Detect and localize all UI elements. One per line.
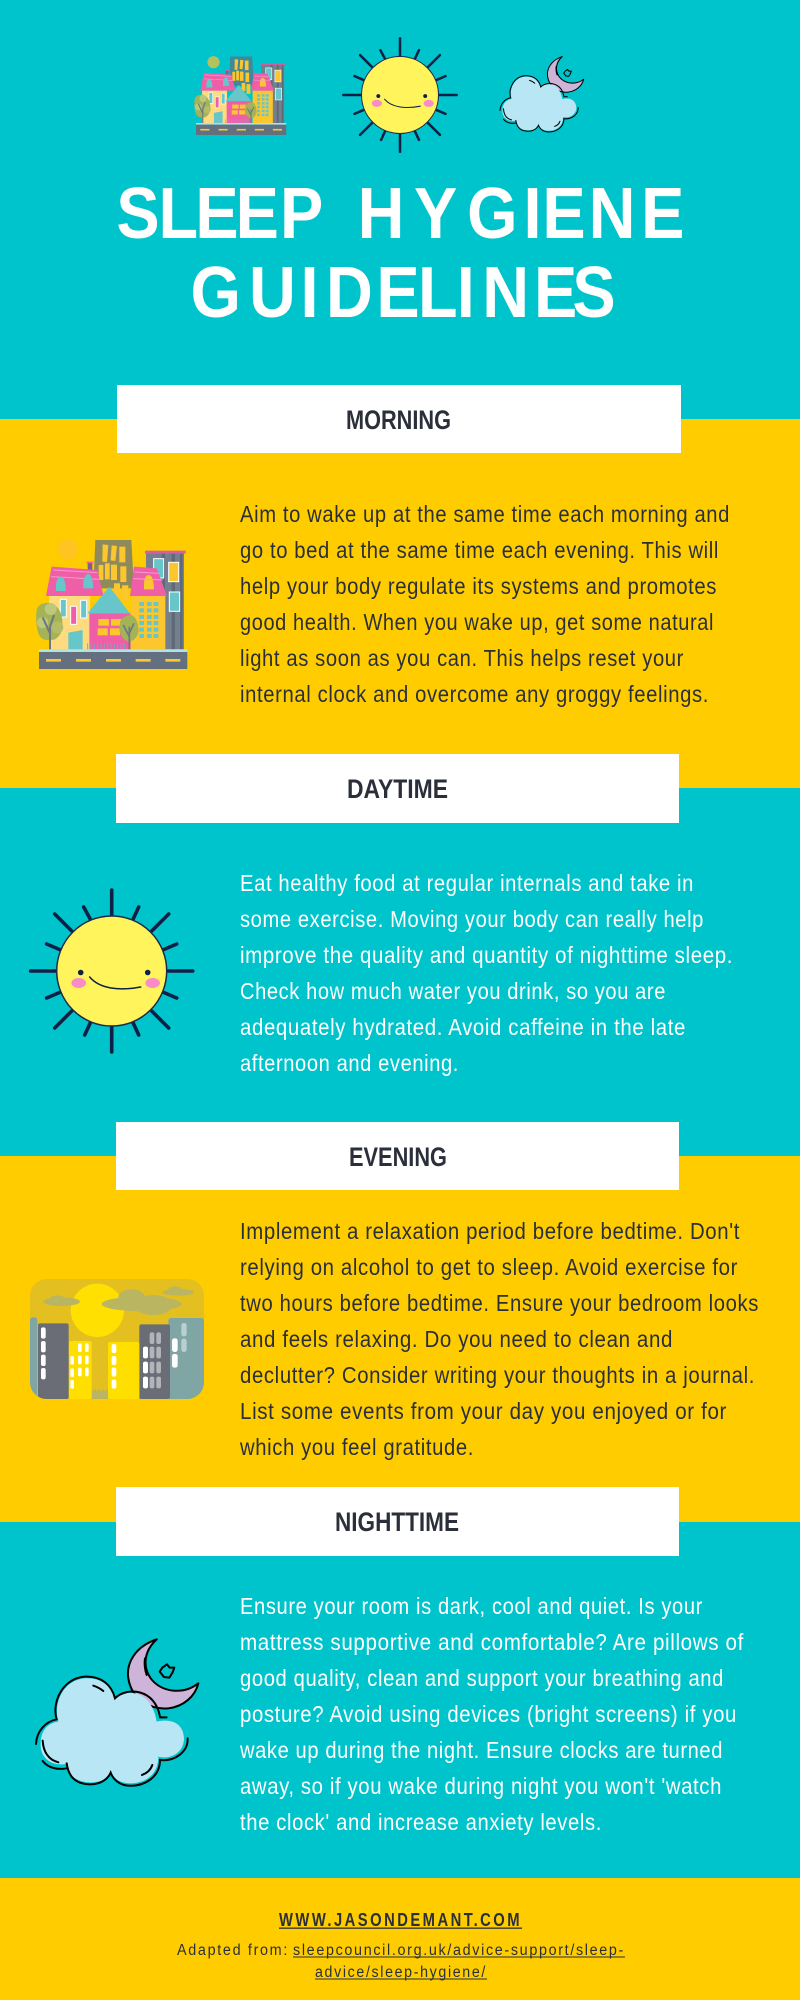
heading: nighttime bbox=[116, 1487, 679, 1556]
source credit: advice/sleep-hygiene/ bbox=[315, 1964, 487, 1981]
heading: daytime: DAYTIME bbox=[347, 774, 448, 804]
text: evening advice: relying on alcohol to get to sleep. Avoid exercise for bbox=[240, 1254, 738, 1280]
heading: morning: MORNING bbox=[346, 405, 451, 435]
text: nighttime advice: the clock' and increase anxiety levels. bbox=[240, 1809, 602, 1835]
text: nighttime advice: good quality, clean and support your breathing and bbox=[240, 1665, 724, 1691]
text: evening advice: Implement a relaxation period before bedtime. Don't bbox=[240, 1218, 740, 1244]
text: nighttime advice: wake up during the night. Ensure clocks are turned bbox=[239, 1737, 723, 1763]
text: nighttime advice bbox=[239, 1593, 744, 1835]
heading: daytime bbox=[116, 754, 679, 823]
icon: smiling sun bbox=[31, 890, 193, 1052]
text: nighttime advice: posture? Avoid using devices (bright screens) if you bbox=[240, 1701, 737, 1727]
text: evening advice: List some events from your day you enjoyed or for bbox=[240, 1398, 727, 1424]
icon: city skyline at sunset bbox=[30, 1279, 204, 1399]
header icons bbox=[194, 38, 584, 152]
text: evening advice bbox=[239, 1218, 759, 1460]
panel: evening bbox=[0, 1122, 800, 1522]
heading: nighttime: NIGHTTIME bbox=[335, 1507, 459, 1537]
text: daytime advice: some exercise. Moving your body can really help bbox=[240, 906, 704, 932]
heading: morning bbox=[117, 385, 681, 453]
source credit: Adapted from: bbox=[177, 1942, 289, 1959]
title: GUIDELINES bbox=[191, 252, 616, 333]
text: morning advice: good health. When you wake up, get some natural bbox=[240, 609, 714, 635]
text: nighttime advice: away, so if you wake during night you won't 'watch bbox=[240, 1773, 722, 1799]
heading: evening: EVENING bbox=[349, 1142, 447, 1172]
text: daytime advice: Eat healthy food at regular internals and take in bbox=[240, 870, 694, 896]
panel: nighttime bbox=[0, 1487, 800, 1878]
text: daytime advice bbox=[240, 870, 733, 1076]
title bbox=[116, 173, 684, 333]
panel: footer bbox=[0, 1878, 800, 2000]
heading: evening bbox=[116, 1122, 679, 1190]
text: daytime advice: improve the quality and quantity of nighttime sleep. bbox=[240, 942, 733, 968]
text: evening advice: which you feel gratitude. bbox=[239, 1434, 474, 1460]
icon: city bbox=[194, 56, 286, 135]
icon: cloud and moon bbox=[500, 57, 584, 132]
text: daytime advice: adequately hydrated. Avoid caffeine in the late bbox=[240, 1014, 686, 1040]
title: SLEEP HYGIENE bbox=[116, 173, 684, 254]
text: nighttime advice: Ensure your room is dark, cool and quiet. Is your bbox=[240, 1593, 703, 1619]
icon: city illustration bbox=[36, 539, 187, 669]
website link: WWW.JASONDEMANT.COM bbox=[279, 1910, 522, 1930]
text: morning advice: go to bed at the same time each evening. This will bbox=[240, 537, 719, 563]
icon: sun bbox=[343, 38, 457, 152]
text: daytime advice: afternoon and evening. bbox=[240, 1050, 459, 1076]
panel: morning bbox=[0, 385, 800, 788]
text: morning advice: Aim to wake up at the same time each morning and bbox=[240, 501, 730, 527]
text: morning advice bbox=[240, 501, 730, 707]
text: daytime advice: Check how much water you drink, so you are bbox=[240, 978, 666, 1004]
icon: cloud and crescent moon bbox=[36, 1639, 198, 1786]
text: morning advice: internal clock and overcome any groggy feelings. bbox=[240, 681, 709, 707]
panel: daytime bbox=[0, 754, 800, 1156]
text: morning advice: light as soon as you can. This helps reset your bbox=[240, 645, 684, 671]
source credit bbox=[177, 1942, 625, 1981]
text: evening advice: and feels relaxing. Do you need to clean and bbox=[240, 1326, 673, 1352]
source credit: sleepcouncil.org.uk/advice-support/sleep- bbox=[293, 1942, 625, 1959]
text: nighttime advice: mattress supportive and comfortable? Are pillows of bbox=[240, 1629, 744, 1655]
text: morning advice: help your body regulate its systems and promotes bbox=[240, 573, 717, 599]
